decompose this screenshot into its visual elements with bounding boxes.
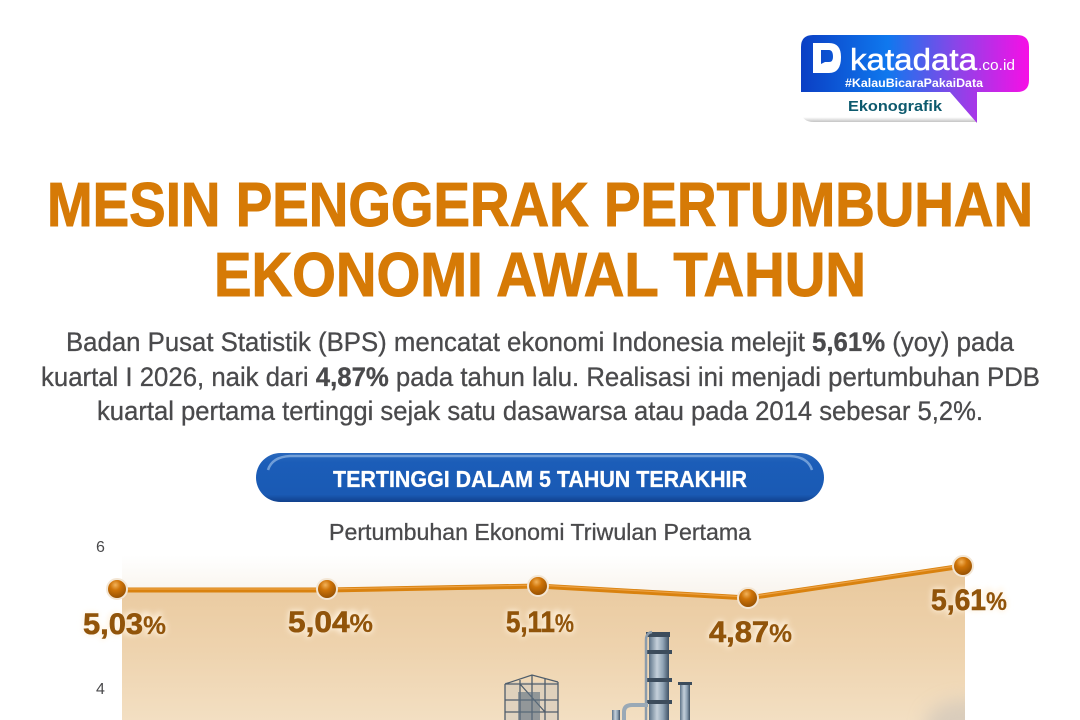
intro text block: Badan Pusat Statistik (BPS) mencatat ekonomi Indonesia melejit 5,61% (yoy) pada — [66, 327, 1015, 357]
logo: katadata Ekonografik — [801, 35, 1029, 123]
area fill under the line — [122, 566, 965, 720]
y axis labels — [96, 539, 105, 698]
intro text block: kuartal I 2026, naik dari 4,87% pada tahun lalu. Realisasi ini menjadi pertumbuhan PDB — [41, 362, 1040, 392]
data markers — [107, 556, 973, 608]
data labels glow: 5,11% — [506, 606, 574, 639]
logo: katadata Ekonografik: Ekonografik — [848, 98, 943, 115]
line — [117, 566, 963, 598]
data labels — [83, 584, 1007, 649]
logo: katadata Ekonografik: .co.id — [978, 57, 1015, 74]
data labels glow: 5,03% — [83, 608, 166, 641]
banner: highest in five years: TERTINGGI DALAM 5 TAHUN TERAKHIR — [333, 466, 747, 492]
data labels glow — [83, 584, 1007, 649]
data labels: 4,87% — [709, 616, 792, 649]
y axis labels: 4 — [96, 681, 105, 698]
haze at right edge — [924, 696, 965, 720]
data labels: 5,61% — [931, 584, 1007, 617]
data labels glow: 4,87% — [709, 616, 792, 649]
data labels glow: 5,04% — [288, 606, 373, 639]
data labels glow: 5,61% — [931, 584, 1007, 617]
banner: highest in five years — [256, 453, 824, 502]
refinery illustration — [505, 632, 692, 720]
data labels: 5,11% — [506, 606, 574, 639]
line chart: first-quarter growth — [83, 539, 1007, 720]
data labels: 5,03% — [83, 608, 166, 641]
chart heading: Pertumbuhan Ekonomi Triwulan Pertama — [329, 519, 751, 545]
y axis labels: 6 — [96, 539, 105, 556]
sky above the line — [122, 555, 965, 598]
logo: katadata Ekonografik: katadata — [850, 42, 978, 77]
title — [47, 171, 1033, 310]
intro text block — [41, 327, 1040, 426]
intro text block: kuartal pertama tertinggi sejak satu dasawarsa atau pada 2014 sebesar 5,2%. — [97, 396, 983, 426]
logo: katadata Ekonografik: #KalauBicaraPakaiData — [845, 76, 983, 90]
title: EKONOMI AWAL TAHUN — [214, 241, 866, 310]
data labels: 5,04% — [288, 606, 373, 639]
